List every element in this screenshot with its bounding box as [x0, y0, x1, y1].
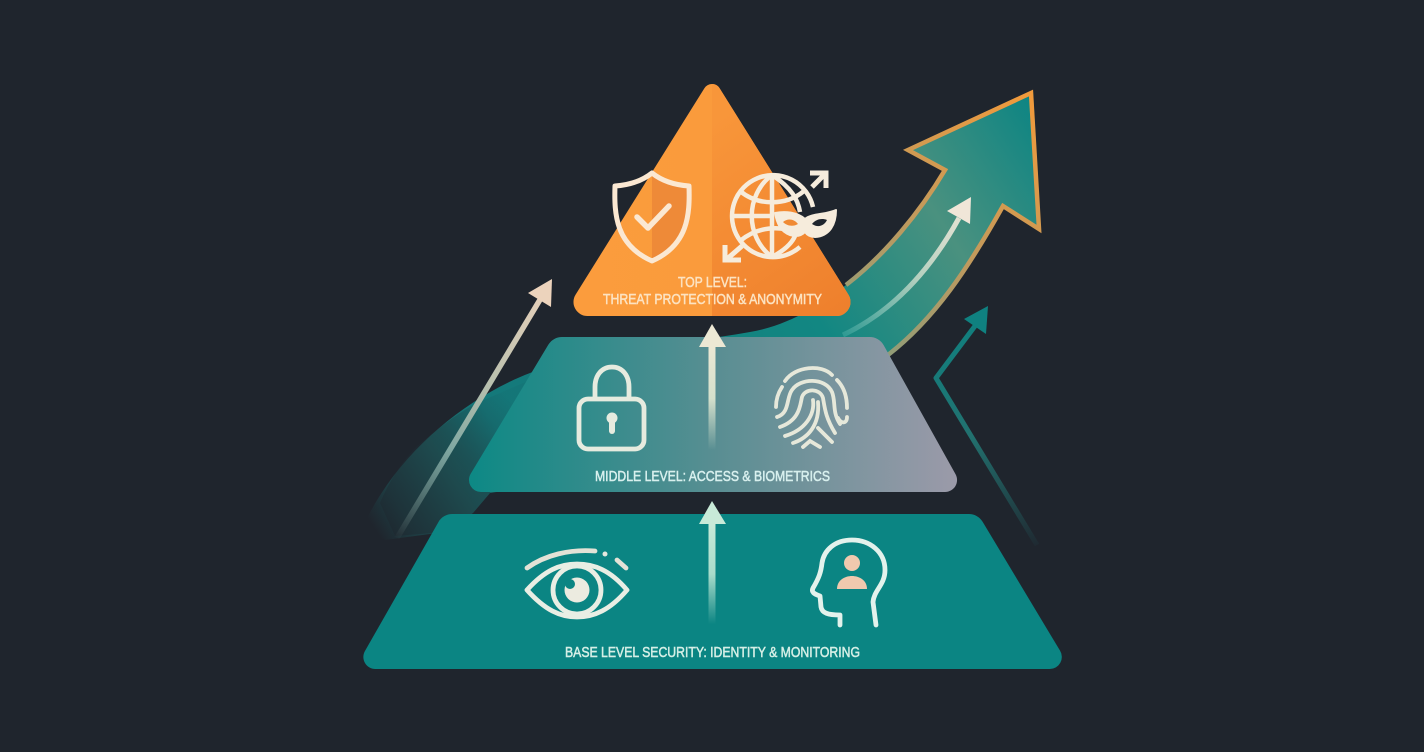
inner white arrow: [843, 197, 971, 335]
panel: top level: [573, 84, 851, 316]
icon: eye: [527, 551, 627, 617]
arrow: middle to top: [699, 324, 726, 450]
panel: base level: [363, 501, 1062, 669]
icon: fingerprint: [776, 368, 847, 447]
icon: padlock: [579, 367, 644, 449]
icon: shield: [615, 173, 689, 261]
arrow: up right: [810, 173, 826, 188]
big rising arrow: [363, 91, 1041, 540]
icon: head with person: [812, 540, 885, 625]
arrow: down left: [725, 245, 742, 260]
inner shaded swoosh band: [380, 380, 530, 536]
middle label: MIDDLE LEVEL: ACCESS & BIOMETRICS: [595, 469, 830, 485]
top label: TOP LEVEL:: [678, 275, 747, 291]
mask: [775, 210, 836, 237]
arrow: base to middle: [699, 501, 726, 624]
right thin teal arrow: [936, 306, 1037, 545]
orange arrow outline: [846, 93, 1039, 358]
panel: middle level: [469, 324, 957, 492]
top label: THREAT PROTECTION & ANONYMITY: [603, 292, 822, 308]
base label: BASE LEVEL SECURITY: IDENTITY & MONITORING: [565, 645, 860, 661]
top label: [603, 275, 822, 308]
icon: globe with mask: [725, 173, 836, 260]
left pale arrow: [397, 279, 552, 538]
